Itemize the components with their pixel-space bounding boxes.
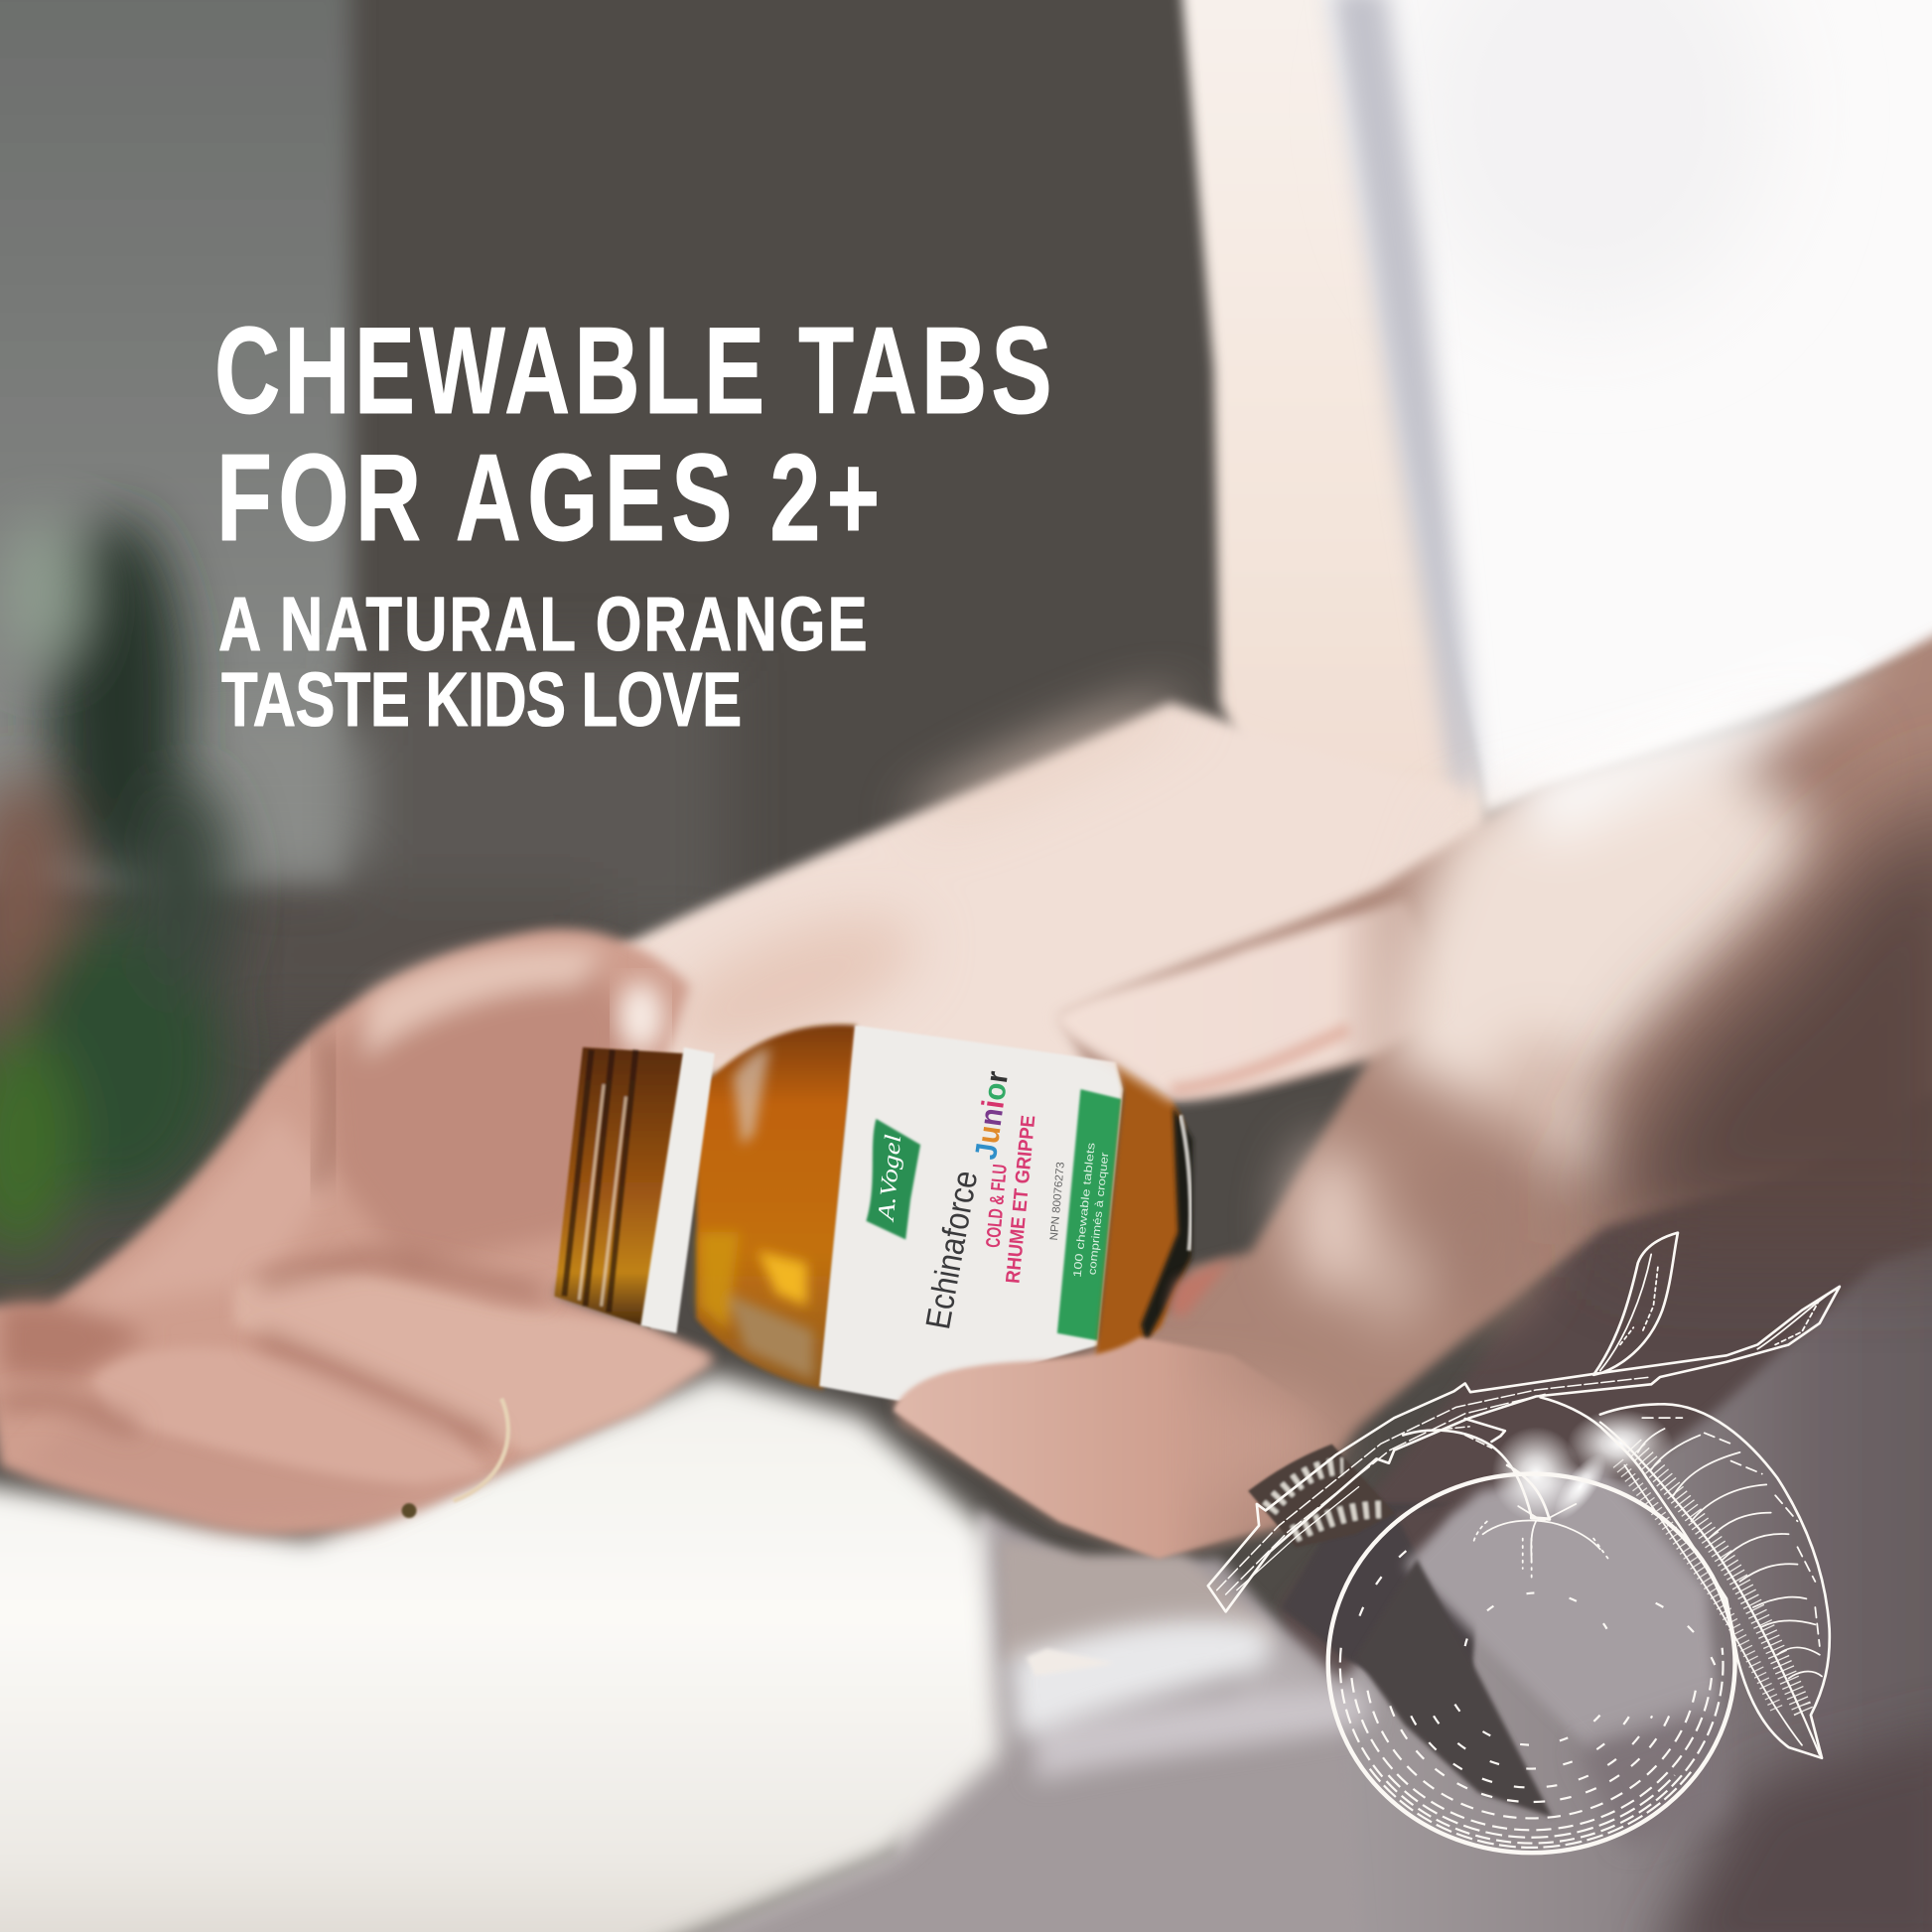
- white table top: [0, 1374, 1001, 1932]
- glass shoulder: [696, 1025, 857, 1390]
- headline line 1: CHEWABLE TABS: [214, 303, 1052, 440]
- bottle neck threads: [554, 1047, 685, 1328]
- branch tip leaf veins: [1757, 1291, 1833, 1349]
- small upper leaf: [1593, 1233, 1678, 1375]
- wall: lower lighter area: [185, 653, 727, 1023]
- branch outline: [1208, 1287, 1840, 1611]
- white glow where hand meets shirt: [1491, 640, 1885, 838]
- green label band: [1057, 1089, 1121, 1340]
- right hand: [894, 617, 1932, 1559]
- light grey patch inside the orange: [1405, 1466, 1719, 1749]
- table surface: [0, 1374, 1725, 1932]
- white collar ring: [640, 1047, 715, 1333]
- label text: comprimés à croquer: [1086, 1152, 1111, 1276]
- plant: green blurred foliage: [0, 517, 234, 1257]
- label text: COLD & FLU: [983, 1164, 1012, 1249]
- label: [819, 1026, 1124, 1401]
- shirt shadow fold: [1330, 0, 1478, 788]
- label text: A.Vogel: [874, 1133, 906, 1224]
- white shirt: [1320, 0, 1932, 813]
- left hand: [0, 929, 715, 1533]
- light glare on the orange stem: [1491, 1410, 1674, 1527]
- headline: [214, 303, 1052, 567]
- pink fingertip shadow: [1169, 1259, 1232, 1318]
- label text: 100 chewable tablets: [1071, 1142, 1098, 1278]
- bottle rim highlight: [1180, 1115, 1190, 1251]
- ring on the right hand: [1248, 1445, 1395, 1548]
- big leaf veins: [1618, 1418, 1822, 1713]
- ring on left hand: [454, 1399, 508, 1501]
- headline line 2: FOR AGES 2+: [216, 430, 880, 567]
- palm highlight by thumb: [619, 982, 663, 1051]
- forearm: [617, 702, 1478, 1084]
- label text: NPN 80076273: [1048, 1162, 1067, 1241]
- illustration: orange with branch and leaves: [1208, 1233, 1840, 1853]
- fingertip over the bottle: [1053, 899, 1453, 1100]
- product bottle: [554, 899, 1453, 1559]
- dark diagonal band inside the orange: [1355, 1559, 1553, 1818]
- shirt soft shade: [1405, 0, 1774, 321]
- shaded lower surface: [617, 1509, 1368, 1932]
- trousers dark lower right corner: [1651, 1725, 1932, 1932]
- upper arm: [1180, 0, 1485, 936]
- hand light and shadow modelling: [1035, 725, 1861, 1497]
- bottle base glass: [1093, 1059, 1189, 1383]
- big leaf outline: [1541, 1397, 1830, 1758]
- label text: [874, 1069, 1111, 1332]
- left hand index finger: [92, 1348, 486, 1485]
- palm crease: [314, 1035, 332, 1189]
- label text: Echinaforce: [919, 1168, 985, 1332]
- thumb over the label: [894, 1337, 1343, 1559]
- reflected light streaks: [1011, 1620, 1368, 1780]
- wall: left grey panel: [0, 0, 351, 888]
- left hand middle finger: [234, 1270, 715, 1453]
- finger crease shadows: [0, 1257, 542, 1442]
- orange peel dimples: [1340, 1543, 1724, 1848]
- subheading: [218, 581, 868, 743]
- glass reflections: [700, 1047, 813, 1380]
- orange fruit outline: [1328, 1474, 1735, 1853]
- lighter grey trousers panel: [1330, 1232, 1932, 1932]
- shade band behind ledge: [1001, 1540, 1282, 1663]
- label text: Junior: [968, 1069, 1015, 1162]
- orange calyx: [1474, 1504, 1609, 1578]
- trousers dark upper band: [1282, 936, 1932, 1932]
- A.Vogel leaf logo: [866, 1119, 920, 1240]
- subheading line 1: A NATURAL ORANGE: [218, 581, 868, 667]
- fruit stem: [1403, 1419, 1550, 1519]
- shadow on the back of the hand: [1614, 776, 1932, 1245]
- finger lower pink rim: [1171, 1029, 1349, 1090]
- subheading line 2: TASTE KIDS LOVE: [221, 656, 742, 743]
- label text: RHUME ET GRIPPE: [1002, 1114, 1039, 1285]
- dark wedge under hand: [1282, 1503, 1478, 1725]
